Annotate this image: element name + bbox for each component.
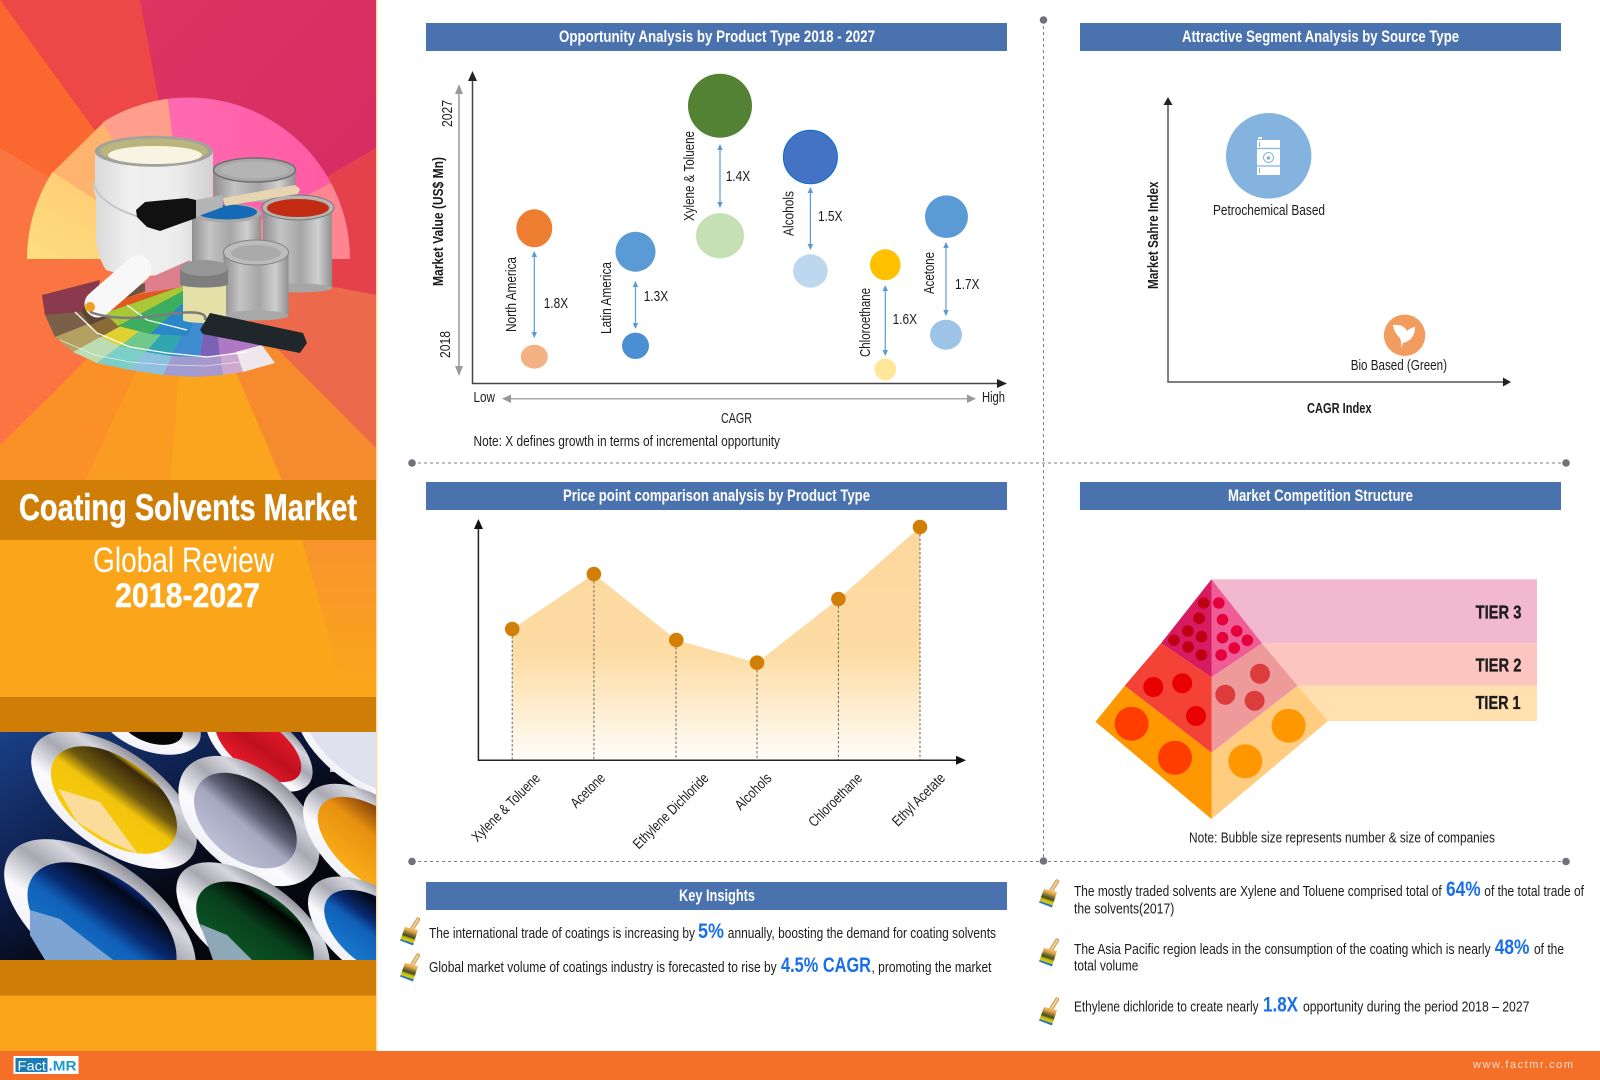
axis title: y: Market Sahre Index [1146,182,1162,289]
roller [85,269,307,353]
bubble: petrochemical: Petrochemical Based [1213,203,1325,219]
bubble pair: Chloroethane: Chloroethane [858,288,874,357]
can: yellow [31,732,197,869]
category labels: Acetone [568,771,609,812]
website: www.factmr.com [1472,1059,1573,1071]
paint brush [136,185,300,231]
heading: key insights [426,882,1007,910]
colour fan [42,260,275,377]
small jar [180,260,228,323]
tier band 1 [1298,686,1537,721]
pyramid [1096,579,1328,819]
bubble pair: Xylene and Toluene: Xylene & Toluene [682,131,698,221]
can: blue [4,839,196,960]
bubble pair: North America: 1.8X [544,296,568,312]
category labels: Chloroethane [806,771,866,831]
y axis labels: Market Value (US$ Mn) [431,157,447,286]
front small can [224,240,288,320]
red paint can [262,195,334,292]
bubble pair: Latin America: 1.3X [644,289,668,305]
tier band 2 [1262,643,1537,686]
insight: asia pacific: 48% [1495,936,1530,959]
y axis labels: 2027 [440,100,456,127]
bubble: bio based: Bio Based (Green) [1351,358,1447,374]
subtitle: Global Review [93,541,275,580]
icon: barrel [1257,137,1280,175]
icon: leaf [1393,325,1415,349]
bubble pair: Latin America [599,232,668,359]
note: Note: X defines growth in terms of incremental opportunity [474,434,781,450]
can: small blue [308,876,376,960]
insight: asia pacific: total volume [1074,959,1138,975]
insight: xylene and toluene [1039,878,1585,917]
image: paint cans, brush, roller and colour fan [42,136,334,377]
insight: trade growth [400,920,996,946]
heading: opportunity analysis: Opportunity Analysis by Product Type 2018 - 2027 [559,28,875,46]
panel: source type [1080,23,1561,417]
y axis labels [431,100,456,358]
bubble pair: Latin America: Latin America [599,261,615,334]
can: orange [303,784,376,886]
bubble pair: Acetone: 1.7X [955,277,980,293]
insight: asia pacific: The Asia Pacific region leads in the consumption of the coating which is nearly [1074,942,1491,958]
tier band 3: TIER 3 [1476,602,1521,622]
panel: left sidebar [0,0,378,1051]
heading: competition: Market Competition Structure [1228,487,1413,505]
category labels [469,771,949,853]
period: 2018-2027 [115,577,260,615]
bubble pair: Xylene and Toluene [682,74,752,258]
axis title: x: CAGR Index [1307,401,1372,417]
bubble pair: Alcohols: 1.5X [818,209,843,225]
back grey can [214,158,296,202]
decorative band: above photo [0,697,376,732]
insight: ethylene dichloride: 1.8X [1263,994,1298,1017]
bubble: petrochemical [1213,113,1325,219]
bubble pair: Chloroethane: 1.6X [893,312,917,328]
bubble pair: Alcohols: Alcohols [782,191,798,236]
insight: trade growth: annually, boosting the demand for coating solvents [728,926,996,942]
insight: trade growth: The international trade of coatings is increasing by [429,926,696,942]
insight: asia pacific: of the [1534,942,1564,958]
decorative band: below photo [0,960,376,996]
can: black [111,732,201,755]
can: white [301,732,376,795]
note: Note: Bubble size represents number & size of companies [1189,831,1495,847]
image: open paint cans [0,732,376,960]
tier band 2: TIER 2 [1476,656,1521,676]
can: red [207,732,313,792]
insight: market volume [400,954,992,982]
category labels: Ethylene Dichloride [630,771,712,853]
insight: market volume: Global market volume of coatings industry is forecasted to rise by [429,960,777,976]
dividers [408,16,1570,865]
logo: Fact.MR: .MR [48,1058,76,1074]
heading: price point [426,482,1007,510]
footer bar [0,1051,1600,1080]
insight: ethylene dichloride: Ethylene dichloride to create nearly [1074,1000,1259,1016]
logo: Fact.MR: Fact [18,1058,46,1074]
semicircle highlight [27,98,350,259]
y axis labels: 2018 [438,331,454,358]
insight: trade growth: 5% [698,920,724,943]
insight: asia pacific [1039,936,1564,975]
insight: market volume: 4.5% CAGR [781,954,871,977]
axes [1164,97,1511,386]
x axis labels [474,390,1005,427]
category labels: Xylene & Toluene [469,771,544,845]
insight: xylene and toluene: The mostly traded solvents are Xylene and Toluene comprised total of [1074,884,1442,900]
logo: Fact.MR [14,1056,78,1074]
white bucket [93,136,213,276]
heading: source type: Attractive Segment Analysis by Source Type [1182,28,1459,46]
x axis labels: CAGR [721,411,752,427]
area chart [474,519,966,765]
heading: competition [1080,482,1561,510]
insight: ethylene dichloride [1039,994,1529,1026]
can: grey [178,756,320,886]
heading: key insights: Key Insights [679,887,755,905]
insight: ethylene dichloride: opportunity during the period 2018 – 2027 [1303,1000,1529,1016]
category labels: Ethyl Acetate [889,771,949,830]
title band: Coating Solvents Market [19,487,357,528]
title band [0,480,376,540]
panel: key insights left [400,882,1007,982]
heading: source type [1080,23,1561,51]
bubble: bio based [1351,315,1447,374]
bubble pair: Chloroethane [858,249,917,380]
panel: market competition [1080,482,1561,847]
x axis labels: High [982,390,1005,406]
bubble pair: Acetone [922,195,980,350]
panel: opportunity analysis [426,23,1007,450]
insight: xylene and toluene: the solvents(2017) [1074,901,1174,917]
bubble pair: North America: North America [504,256,520,332]
tier band 3 [1212,579,1537,643]
bubble pair: North America [504,209,568,369]
chart axes [455,71,1007,403]
tier band 1: TIER 1 [1476,693,1521,713]
blue paint can [192,204,262,265]
heading: price point: Price point comparison analysis by Product Type [563,487,870,505]
sunburst background [0,0,376,480]
panel: key insights right [1039,878,1585,1026]
x axis labels: Low [474,390,495,406]
can: green [176,862,330,960]
insight: market volume: , promoting the market [872,960,992,976]
panel: price point comparison [426,482,1007,853]
bubble pair: Acetone: Acetone [922,252,938,294]
heading: opportunity analysis [426,23,1007,51]
insight: xylene and toluene: 64% [1446,878,1481,901]
category labels: Alcohols [732,771,775,814]
bubble pair: Xylene and Toluene: 1.4X [726,169,750,185]
bubble pair: Alcohols [782,130,843,288]
